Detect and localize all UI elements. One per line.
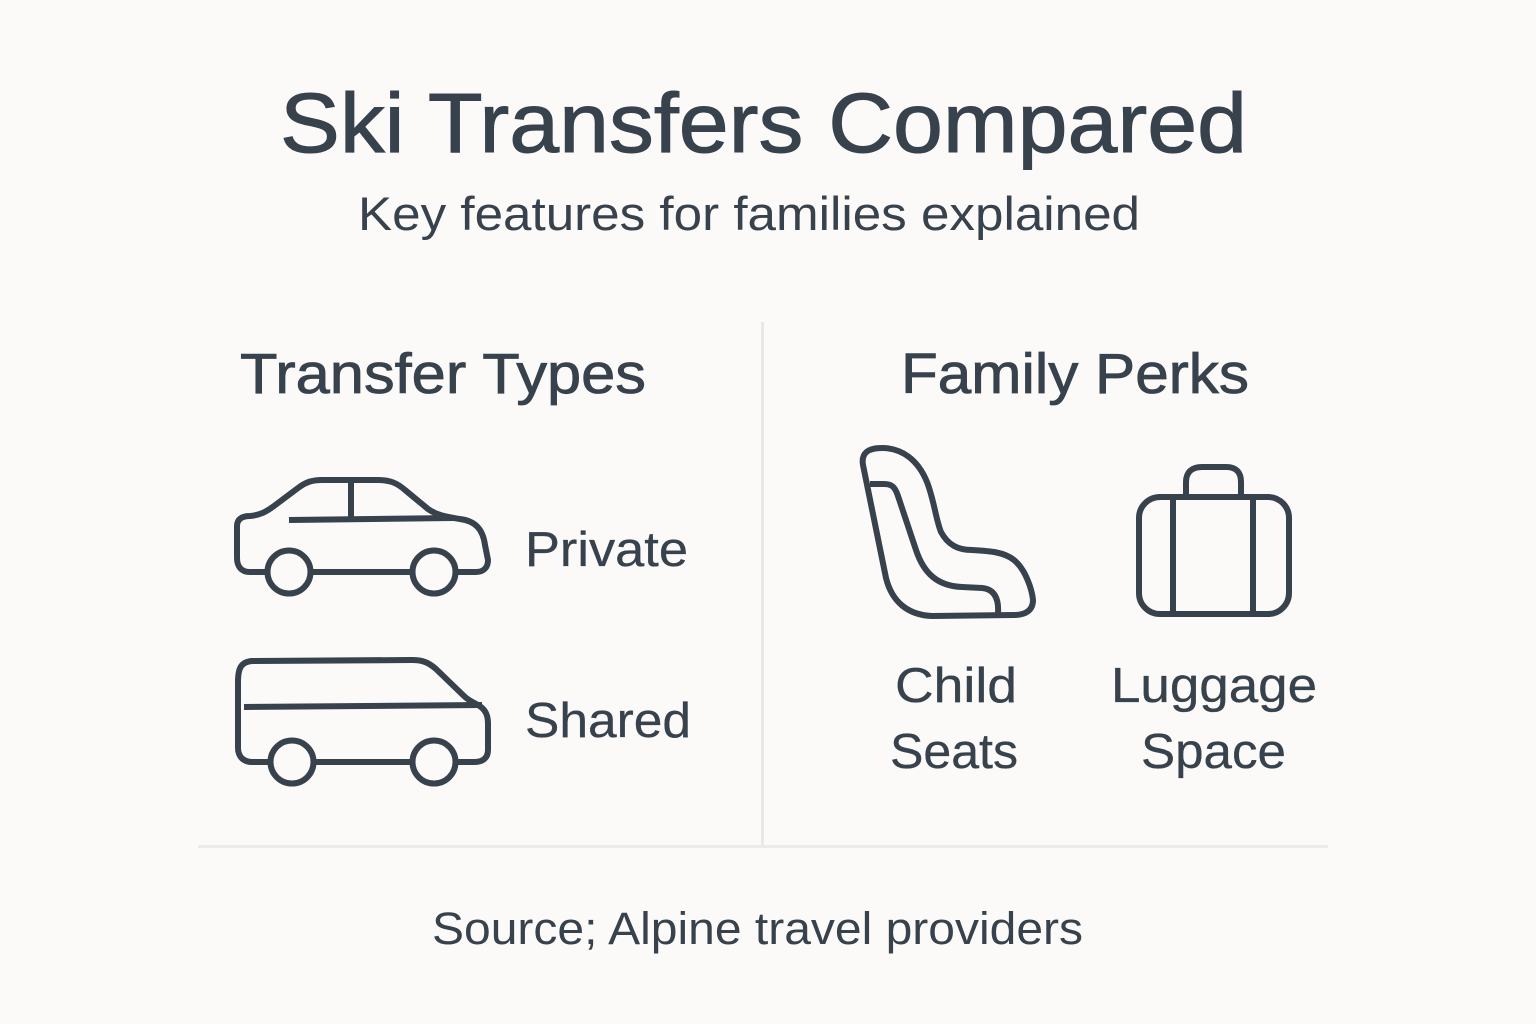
panel: family perks bbox=[863, 342, 1317, 779]
icon: luggage bbox=[1139, 467, 1289, 614]
source note: Source; Alpine travel providers bbox=[432, 903, 1083, 954]
panel: transfer types bbox=[237, 342, 691, 784]
label: child seats: Child bbox=[895, 659, 1017, 713]
icon: car bbox=[237, 480, 488, 594]
heading: transfer types: Transfer Types bbox=[240, 342, 646, 406]
label: luggage space bbox=[1111, 659, 1317, 779]
heading: family perks: Family Perks bbox=[901, 342, 1249, 406]
label: private: Private bbox=[525, 523, 688, 577]
label: shared: Shared bbox=[525, 694, 691, 748]
subtitle: Key features for families explained bbox=[358, 187, 1140, 240]
title: Ski Transfers Compared bbox=[280, 76, 1247, 170]
icon: van bbox=[238, 660, 488, 784]
label: luggage space: Luggage bbox=[1111, 659, 1317, 713]
label: luggage space: Space bbox=[1141, 725, 1286, 779]
icon: child seat bbox=[863, 448, 1033, 616]
label: child seats bbox=[890, 659, 1018, 779]
label: child seats: Seats bbox=[890, 725, 1018, 779]
